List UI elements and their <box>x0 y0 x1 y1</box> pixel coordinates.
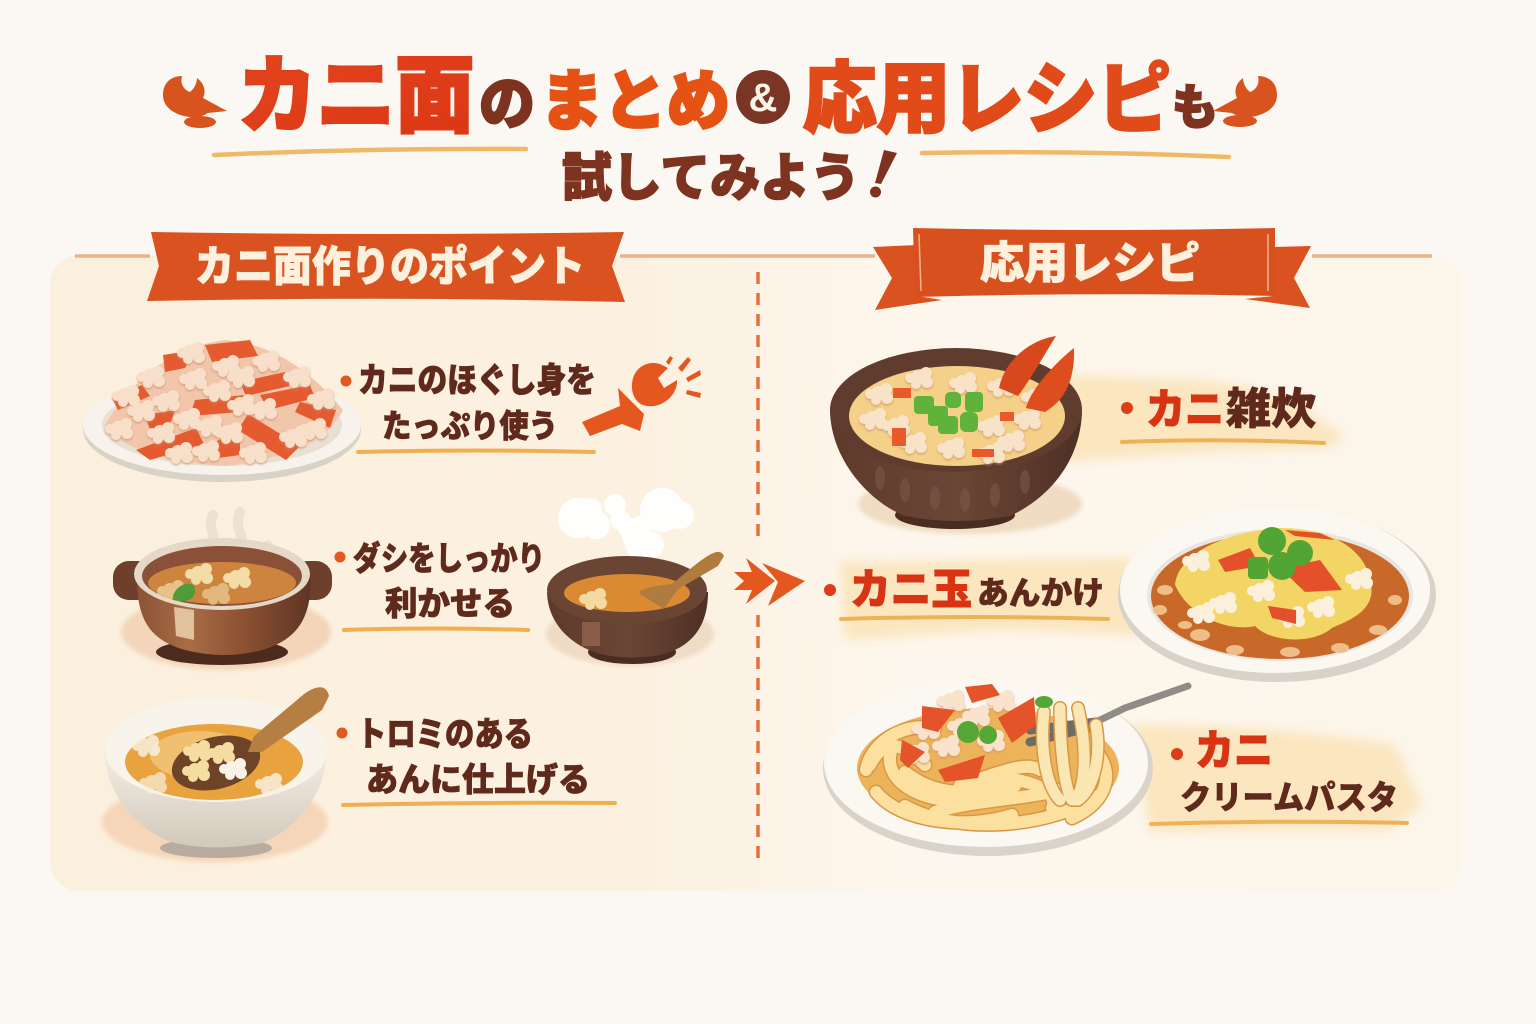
illustration: white bowl with spoon <box>102 687 329 862</box>
illustration: crab zosui bowl <box>830 336 1082 534</box>
panel: content background <box>50 255 1462 891</box>
watercolor highlights <box>840 375 1422 832</box>
title underlines <box>214 149 1229 157</box>
text: recipe 3 <box>1151 727 1407 824</box>
section rule lines <box>75 254 1432 258</box>
illustration: crab cream pasta <box>823 679 1188 856</box>
illustration: crab flake plate <box>83 340 361 482</box>
arrow: left to right <box>734 558 805 606</box>
text: recipe 1 <box>1121 386 1324 443</box>
text: recipe 1: カニ <box>1146 386 1224 433</box>
text: tip 2 <box>334 540 545 630</box>
dashed divider <box>756 272 760 862</box>
text: tip 1 <box>340 362 596 452</box>
text: tip 2: 利かせる <box>385 585 515 622</box>
text: tip 1: たっぷり使う <box>382 408 558 444</box>
text: tip 1: カニのほぐし身を <box>358 362 596 400</box>
title heading: の <box>479 72 535 137</box>
illustration: kanitama plate <box>1118 507 1436 682</box>
illustration: dashi bowl with steam <box>546 488 724 666</box>
banner: left heading: カニ面作りのポイント <box>195 243 585 290</box>
text: tip 3: トロミのある <box>357 716 533 754</box>
text: tip 3 <box>336 716 615 805</box>
banner: right heading: 応用レシピ <box>980 239 1200 288</box>
icon: crab claw left <box>163 76 227 128</box>
title heading: カニ面 <box>238 49 474 143</box>
text: recipe 2: あんかけ <box>977 575 1104 611</box>
text: recipe 3: カニ <box>1195 727 1273 774</box>
title heading <box>163 49 1277 208</box>
text: recipe 2: カニ玉 <box>850 566 972 613</box>
text: recipe 3: クリームパスタ <box>1180 779 1398 816</box>
banner: left heading <box>147 232 625 302</box>
title heading: 応用レシピ <box>803 55 1171 143</box>
icon: crab claw right <box>1213 76 1277 127</box>
title heading: 試してみよう <box>562 150 860 208</box>
text: recipe 1: 雑炊 <box>1226 386 1316 434</box>
text: recipe 2 <box>824 566 1108 619</box>
text: tip 3: あんに仕上げる <box>366 761 590 798</box>
title heading: も <box>1172 82 1218 135</box>
banner: right heading <box>873 228 1311 310</box>
ampersand badge <box>736 70 790 124</box>
ampersand badge: & <box>749 76 777 120</box>
exclamation mark <box>870 150 897 198</box>
text: tip 2: ダシをしっかり <box>353 540 545 577</box>
illustration: steaming clay pot <box>113 512 332 670</box>
icon: crab claw with arrow <box>582 356 701 436</box>
title heading: まとめ <box>540 64 730 138</box>
